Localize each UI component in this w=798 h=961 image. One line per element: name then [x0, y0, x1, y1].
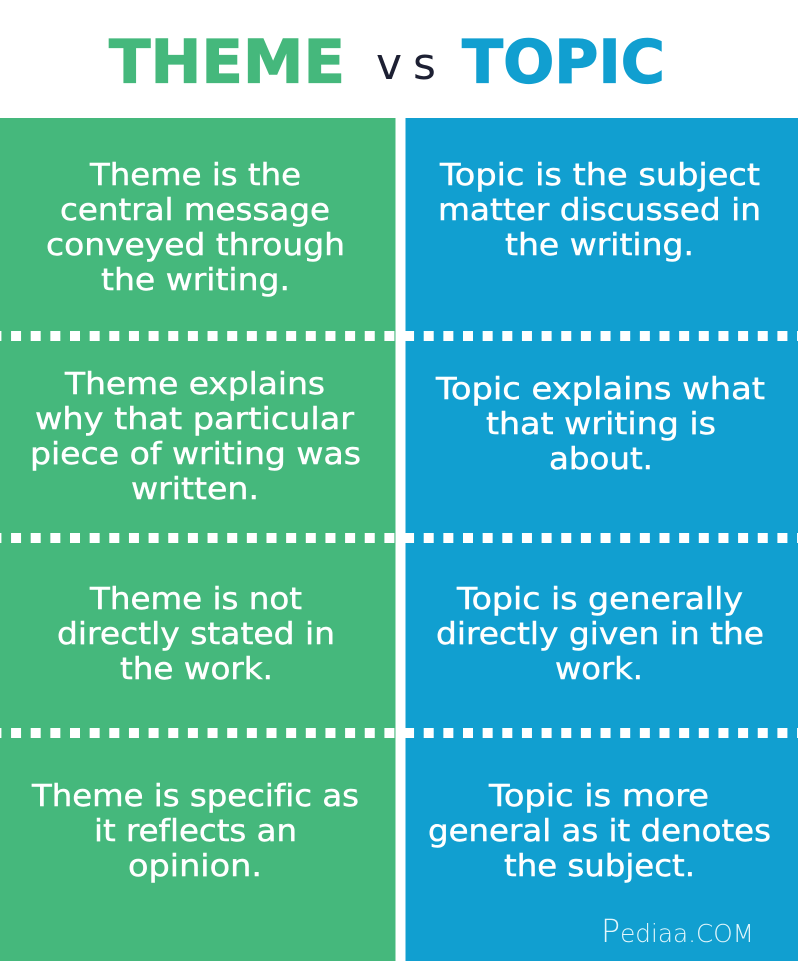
text block: theme not stated: directly stated in [57, 617, 335, 652]
text block: topic subject matter: matter discussed in [438, 193, 761, 228]
text block: theme specific [31, 779, 359, 884]
text block: topic directly given: work. [555, 652, 643, 687]
text block: theme not stated [57, 582, 335, 687]
text block: theme central message: conveyed through [46, 228, 345, 263]
text block: theme explains why: Theme explains [64, 367, 325, 402]
text block: topic subject matter [438, 158, 761, 263]
panel: topic column [406, 118, 798, 961]
text block: theme central message [46, 158, 345, 298]
text block: theme explains why: why that particular [35, 402, 355, 437]
text block: topic explains what: about. [549, 442, 653, 477]
heading: vs: s [413, 39, 436, 90]
text block: topic explains what [435, 372, 765, 477]
text block: topic general: Topic is more [488, 779, 709, 814]
heading: vs: v [376, 39, 402, 90]
text block: theme specific: it reflects an [94, 814, 297, 849]
title [109, 28, 665, 98]
text block: theme central message: central message [60, 193, 330, 228]
text block: theme explains why: written. [131, 472, 259, 507]
text block: topic directly given: Topic is generally [456, 582, 743, 617]
text block: topic directly given: directly given in the [436, 617, 764, 652]
logo: pediaa.com: Pediaa.COM [601, 912, 754, 950]
text block: theme specific: Theme is specific as [31, 779, 359, 814]
panel: theme column [0, 118, 396, 961]
text block: topic general [428, 779, 771, 884]
heading: topic: TOPIC [462, 28, 665, 98]
text block: topic explains what: Topic explains what [435, 372, 765, 407]
text block: theme explains why [30, 367, 361, 507]
text block: topic general: the subject. [504, 849, 695, 884]
text block: theme central message: the writing. [101, 263, 290, 298]
text block: theme not stated: the work. [120, 652, 273, 687]
text block: topic directly given [436, 582, 764, 687]
text block: topic subject matter: the writing. [505, 228, 694, 263]
text block: theme central message: Theme is the [89, 158, 301, 193]
text block: topic subject matter: Topic is the subject [439, 158, 760, 193]
text block: topic general: general as it denotes [428, 814, 771, 849]
text block: theme not stated: Theme is not [89, 582, 302, 617]
text block: theme specific: opinion. [128, 849, 262, 884]
heading: theme: THEME [109, 28, 345, 98]
text block: topic explains what: that writing is [486, 407, 716, 442]
text block: theme explains why: piece of writing was [30, 437, 361, 472]
